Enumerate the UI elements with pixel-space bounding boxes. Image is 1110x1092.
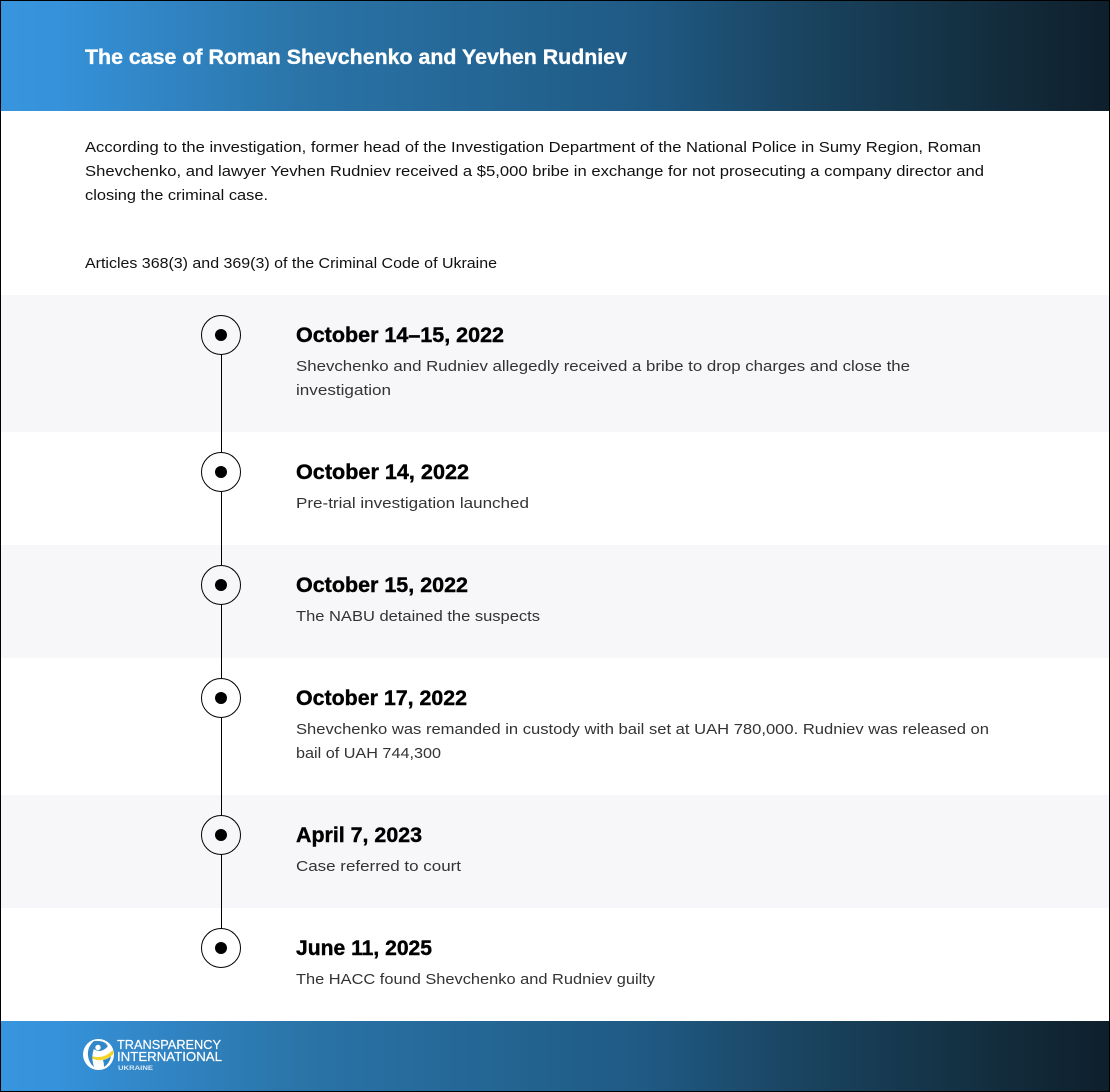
footer banner: [0, 1021, 1110, 1092]
date 3: October 15, 2022: [296, 574, 468, 597]
timeline event 5: [202, 816, 462, 875]
intro paragraph: Shevchenko, and lawyer Yevhen Rudniev received a $5,000 bribe in exchange for not prosecuting a company director and: [85, 163, 984, 180]
date 4: October 17, 2022: [296, 687, 467, 710]
panel: row 5 background: [0, 795, 1110, 908]
description 4: Shevchenko was remanded in custody with bail set at UAH 780,000. Rudniev was released on: [296, 721, 989, 738]
description 2: Pre-trial investigation launched: [296, 495, 529, 512]
date 5: April 7, 2023: [296, 824, 422, 847]
timeline line: [220, 335, 222, 948]
panel: row 3 background: [0, 545, 1110, 658]
timeline event 3: [202, 566, 540, 625]
description 1: [296, 358, 910, 399]
icon: marker 3: [202, 566, 240, 604]
logo wordmark: UKRAINE: [118, 1065, 154, 1072]
logo wordmark: [117, 1037, 222, 1072]
intro paragraph: [85, 139, 984, 204]
logo wordmark: INTERNATIONAL: [117, 1049, 222, 1064]
icon: marker 2: [202, 452, 240, 492]
icon: logo emblem: [83, 1039, 114, 1070]
title: The case of Roman Shevchenko and Yevhen Rudniev: [85, 46, 627, 69]
panel: row 1 background: [0, 295, 1110, 432]
timeline event 6: [202, 928, 656, 988]
description 5: Case referred to court: [296, 858, 462, 875]
timeline event 2: [202, 452, 529, 512]
date 1: October 14–15, 2022: [296, 324, 504, 347]
description 4: bail of UAH 744,300: [296, 745, 441, 762]
header banner: [0, 0, 1110, 111]
icon: marker 5: [202, 816, 240, 854]
legal articles: Articles 368(3) and 369(3) of the Criminal Code of Ukraine: [85, 255, 497, 272]
icon: marker 1: [202, 316, 240, 354]
description 4: [296, 721, 989, 762]
description 6: The HACC found Shevchenko and Rudniev guilty: [296, 971, 656, 988]
description 1: investigation: [296, 382, 391, 399]
description 3: The NABU detained the suspects: [296, 608, 540, 625]
timeline event 1: [202, 316, 910, 399]
date 2: October 14, 2022: [296, 461, 469, 484]
icon: marker 6: [202, 928, 240, 968]
logo: Transparency International Ukraine: [83, 1037, 222, 1072]
logo wordmark: TRANSPARENCY: [117, 1037, 221, 1052]
intro paragraph: closing the criminal case.: [85, 187, 268, 204]
description 1: Shevchenko and Rudniev allegedly received a bribe to drop charges and close the: [296, 358, 910, 375]
icon: marker 4: [202, 678, 240, 718]
intro paragraph: According to the investigation, former head of the Investigation Department of the National Police in Sumy Region, Roman: [85, 139, 981, 156]
date 6: June 11, 2025: [296, 937, 432, 960]
timeline event 4: [202, 678, 989, 762]
